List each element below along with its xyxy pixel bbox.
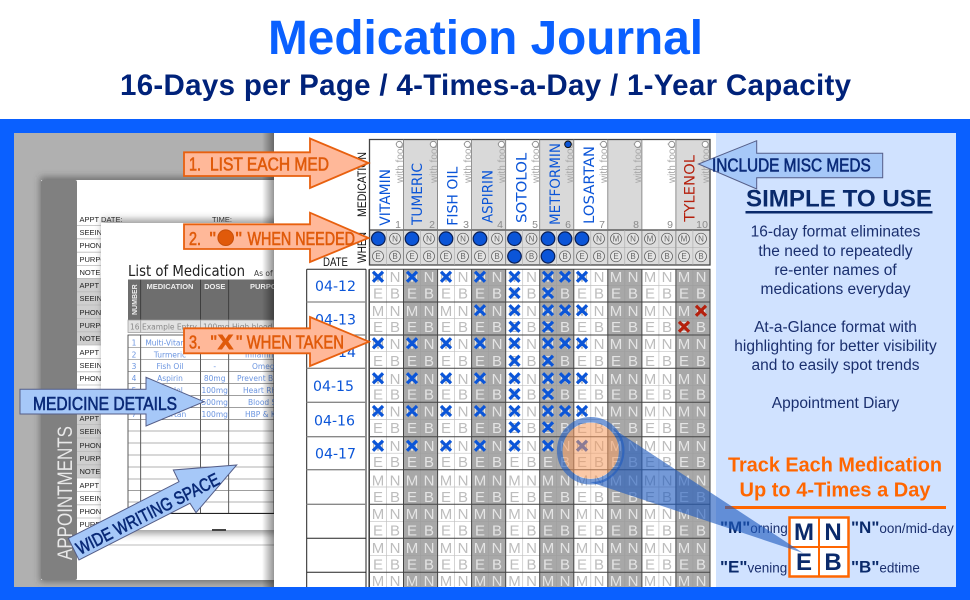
day grid letters: MNMNMNMNMN [406, 371, 706, 388]
date column: 04-15 [313, 379, 354, 395]
medication names: LOSARTAN [582, 146, 598, 224]
appointment page: TIME: [212, 215, 232, 224]
appointment page: NOTES [80, 334, 105, 343]
day grid letters: EBEBEBEBEB [407, 454, 706, 471]
list of medication page: 100mg [202, 410, 228, 419]
list of medication page: - [213, 362, 216, 371]
list of medication page: 3 [132, 362, 137, 371]
appointment page: SEEING [80, 494, 108, 503]
appointment page: PHONE [80, 441, 106, 450]
legend box: B [824, 549, 842, 576]
medication names: ASPIRIN [481, 170, 497, 223]
title: Medication Journal [268, 12, 703, 65]
red taken marks [679, 306, 706, 332]
arrow: when needed [184, 213, 368, 262]
medication names: TYLENOL [682, 155, 698, 223]
appointment page: APPT [80, 348, 100, 357]
appointment page: APPT [80, 414, 100, 423]
description text: Appointment Diary [772, 395, 899, 412]
magnifier lens [560, 420, 622, 482]
day grid letters: MNMNMNMNMN [406, 573, 706, 590]
track heading: Up to 4-Times a Day [740, 480, 931, 502]
day grid letters: EBEBEBEBEB [373, 454, 672, 471]
day grid thin lines [370, 269, 710, 587]
date column: 04-17 [315, 446, 356, 462]
appointment page: PURPOSE [80, 387, 116, 396]
subtitle: 16-Days per Page / 4-Times-a-Day / 1-Year Capacity [120, 69, 852, 102]
day grid letters: EBEBEBEBEB [373, 319, 672, 336]
day grid letters: MNMNMNMNMN [406, 472, 706, 490]
column numbers: 12345678910 [395, 219, 708, 231]
list of medication page: Blood Su [248, 398, 281, 407]
when sub-dividers [370, 230, 710, 265]
day grid letters: EBEBEBEBEB [373, 386, 672, 404]
day grid letters: EBEBEBEBEB [407, 556, 706, 574]
day grid letters: MNMNMNMNMN [406, 438, 706, 455]
day grid letters: MNMNMNMNMN [372, 472, 672, 490]
list page shadow [102, 219, 278, 534]
day grid letters [372, 269, 706, 590]
appointment page: PHONE [80, 308, 106, 317]
list of medication page: As of [254, 269, 273, 278]
list of medication page: 6 [132, 398, 137, 407]
appointment page: PHONE [80, 507, 106, 516]
magnifier beam [590, 428, 803, 553]
arrow: wide writing space: WIDE WRITING SPACE [73, 469, 223, 559]
appointment page: PURPOSE [80, 520, 116, 529]
list of medication page: List of Medication [128, 262, 245, 280]
list of medication page: Aspirin [157, 374, 183, 383]
with food labels: with food [395, 143, 406, 184]
list of medication page: 4 [132, 374, 137, 383]
row axis labels: MEDICATION [357, 152, 369, 217]
description text: 16-day format eliminates [751, 224, 921, 241]
description text: and to easily spot trends [751, 357, 920, 374]
panel: simple to use [716, 133, 956, 587]
list of medication page: PURPOSE [250, 282, 287, 291]
day grid letters: MNMNMNMNMN [372, 506, 672, 523]
appointment page: PURPOSE [80, 454, 116, 463]
arrow: when taken: WHEN TAKEN [247, 332, 344, 352]
day grid letters: MNMNMNMNMN [372, 540, 672, 557]
day grid letters: MNMNMNMNMN [406, 404, 706, 420]
gray backdrop [14, 133, 274, 587]
appointment page: SEEING [80, 427, 108, 436]
list of medication page: 5 [132, 386, 137, 395]
arrow: when taken: X [218, 332, 234, 354]
appointment page: PURPOSE [80, 255, 116, 264]
appointment page: NOTES [80, 401, 105, 410]
day grid letters: EBEBEBEBEB [407, 319, 706, 336]
day grid letters: EBEBEBEBEB [407, 353, 706, 370]
list of medication page: Heart Rh [243, 386, 276, 395]
day grid letters: MNMNMNMNMN [372, 269, 672, 286]
with food labels: with food [667, 143, 678, 184]
arrow: list each med: LIST EACH MED [210, 155, 329, 175]
day grid shaded columns [404, 269, 710, 587]
track heading [728, 455, 942, 502]
appointment page: APPT [80, 481, 100, 490]
day grid letters: EBEBEBEBEB [373, 286, 672, 302]
date column: 04-14 [315, 345, 356, 361]
medication names: SOTOLOL [515, 153, 531, 223]
when circle letters: NNNNNNNNN [392, 234, 704, 244]
with food labels: with food [497, 143, 508, 184]
legend box [790, 518, 848, 576]
day grid letters: EBEBEBEBEB [407, 386, 706, 404]
panel background [716, 133, 956, 587]
description text: highlighting for better visibility [734, 338, 937, 355]
heading underline [746, 211, 932, 214]
description text: medications everyday [761, 281, 911, 298]
panel: notebook pages [14, 133, 287, 587]
list of medication page: High blood pr [232, 322, 284, 332]
with food labels: with food [429, 143, 440, 184]
arrow: when needed: " [210, 229, 216, 249]
legend labels: "E"vening [720, 558, 787, 577]
with food labels: with food [565, 143, 576, 184]
list of medication page: Turmeric [153, 350, 186, 360]
appointment page shadow [40, 177, 276, 582]
medication names [378, 143, 698, 226]
list of medication page: 7 [132, 410, 137, 419]
legend box: E [796, 549, 812, 576]
date column: 04-16 [314, 413, 355, 429]
list of medication page: 500mg [202, 398, 228, 407]
description text: At-a-Glance format with [754, 319, 917, 336]
header column shading [404, 140, 710, 265]
with food labels: with food [701, 143, 712, 184]
date column: 04-13 [315, 312, 356, 328]
arrow: when needed: 2. [189, 229, 201, 249]
arrow: when needed: WHEN NEEDED [248, 229, 355, 249]
list of medication page: NUMBER [132, 284, 139, 315]
with food labels: with food [531, 143, 542, 184]
list of medication page: 1 [132, 338, 137, 348]
with food labels: with food [633, 143, 644, 184]
medication names: VITAMIN [378, 169, 394, 226]
with food labels: with food [599, 143, 610, 184]
arrow: when taken: 3. [189, 332, 201, 352]
when circles filled [372, 232, 589, 263]
list of medication page: Sotolol [157, 386, 183, 395]
day grid letters: EBEBEBEBEB [407, 286, 706, 302]
arrow: list each med [184, 138, 368, 188]
panel: journal grid [307, 140, 712, 590]
when circle letters: BBBBBBBBBB [392, 252, 704, 261]
with food checkboxes [396, 141, 708, 148]
day grid letters: EBEBEBEBEB [373, 556, 672, 574]
row axis labels: WHEN [357, 232, 369, 263]
track underline [725, 506, 946, 509]
list of medication page: DOSE [204, 282, 225, 291]
day grid letters: MNMNMNMNMN [406, 336, 706, 353]
list of medication page: 100mg [202, 386, 228, 395]
day grid letters: MNMNMNMNMN [406, 506, 706, 523]
when circle letters: MMM [613, 234, 688, 244]
shadow from journal page [262, 133, 274, 587]
day grid letters: MNMNMNMNMN [372, 404, 672, 420]
list of medication page: Omega [252, 362, 279, 371]
when circle letters [375, 234, 704, 261]
description text: the need to repeatedly [758, 243, 913, 260]
day grid letters: EBEBEBEBEB [407, 522, 706, 540]
legend labels: "N"oon/mid-day [851, 518, 954, 537]
list of medication page: Losartan [154, 410, 187, 419]
appointment page: SEEING [80, 361, 108, 370]
day grid letters: MNMNMNMNMN [406, 303, 706, 320]
header dividers [404, 140, 676, 265]
day grid letters: EBEBEBEBEB [373, 522, 672, 540]
blue taken marks [373, 272, 587, 451]
list of medication page: Fish Oil [157, 362, 183, 371]
medication names: TUMERIC [410, 163, 426, 226]
appointment page: NOTES [80, 467, 105, 476]
day grid letters: MNMNMNMNMN [372, 303, 672, 320]
day grid letters: EBEBEBEBEB [407, 420, 706, 437]
day grid letters: EBEBEBEBEB [407, 489, 706, 506]
legend box: M [794, 519, 814, 546]
appointment page: APPT DATE: [80, 215, 123, 224]
list of medication page: 100mg [203, 322, 230, 332]
appointment page: NOTES [80, 268, 105, 277]
day grid letters: MNMNMNMNMN [406, 269, 706, 286]
arrow: list each med: 1. [189, 155, 201, 175]
appointment page: SEEING [80, 294, 108, 303]
list of medication page: Example Entry [142, 322, 197, 332]
appointment page: PHONE [80, 374, 106, 383]
with food labels [395, 143, 712, 184]
header grid lines [370, 140, 710, 265]
appointment page: PURPOSE [80, 321, 116, 330]
appointment page: APPT [80, 281, 100, 290]
day grid letters: MNMNMNMNMN [406, 540, 706, 557]
arrow: include misc meds [698, 141, 883, 189]
list of medication page: Inflamm [245, 350, 276, 360]
row axis labels [323, 152, 369, 269]
arrow: when taken: " [210, 332, 217, 352]
journal page background [274, 133, 716, 587]
appointment page: SEEING [80, 228, 108, 237]
date column: 04-12 [315, 279, 356, 295]
day grid dark lines [370, 269, 710, 587]
heading: SIMPLE TO USE [746, 186, 932, 213]
when circle letters: EEEEEEEE [375, 252, 687, 261]
appointment page: PHONE [80, 241, 106, 250]
with food labels: with food [463, 143, 474, 184]
description text: re-enter names of [774, 262, 897, 279]
legend labels [720, 518, 954, 577]
spine label: APPOINTMENTS [54, 426, 77, 560]
day grid letters: MNMNMNMNMN [372, 573, 672, 590]
list of medication page: 2 [132, 350, 137, 360]
arrow: medicine details: MEDICINE DETAILS [33, 394, 177, 414]
day grid letters: MNMNMNMNMN [372, 336, 672, 353]
list of medication page: 80mg [204, 374, 226, 383]
medication names: FISH OIL [446, 167, 462, 226]
day grid letters: EBEBEBEBEB [373, 420, 672, 437]
day grid letters: MNMNMNMNMN [372, 438, 672, 455]
arrow: medicine details [20, 377, 204, 426]
arrow: when taken: " [236, 332, 242, 352]
appointment page [41, 180, 274, 580]
list of medication page [101, 223, 287, 531]
date column [307, 269, 369, 587]
day grid letters: EBEBEBEBEB [373, 489, 672, 506]
legend labels: "B"edtime [851, 558, 920, 577]
day grid letters: MNMNMNMNMN [372, 371, 672, 388]
day grid letters: EBEBEBEBEB [373, 353, 672, 370]
list of medication page: 16 [130, 322, 140, 332]
description text [734, 224, 937, 412]
list of medication page: Metformin [151, 398, 189, 407]
arrow: include misc meds: INCLUDE MISC MEDS [712, 156, 871, 176]
when circles empty [372, 233, 706, 262]
list of medication page: MEDICATION [147, 282, 193, 291]
arrow: when needed: " [236, 229, 242, 249]
legend labels: "M"orning [720, 518, 788, 537]
legend box: N [824, 519, 842, 546]
medication names: METFORMIN [548, 143, 564, 225]
arrow: when taken [184, 317, 369, 366]
list of medication page: Multi-Vitamin [145, 338, 195, 348]
when row shading [370, 230, 710, 265]
list of medication page: HBP & K [245, 410, 277, 419]
row axis labels: DATE [323, 257, 348, 269]
track heading: Track Each Medication [728, 455, 942, 477]
list of medication page: Prevent Bl [237, 374, 275, 383]
